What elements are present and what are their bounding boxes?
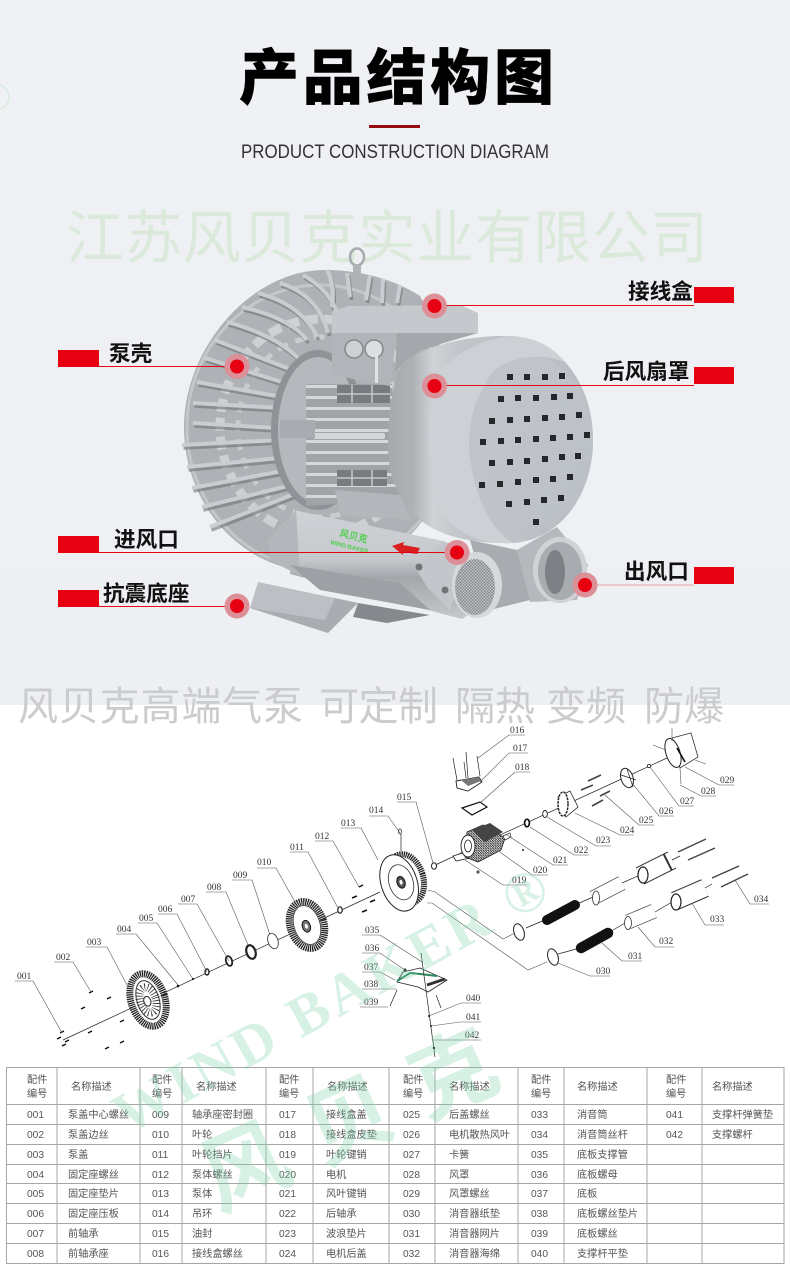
table column group 025 to 032: 消音器海绵 (449, 1247, 500, 1260)
table column group 001 to 008: 固定座压板 (68, 1207, 119, 1220)
table column group 025 to 032: 032 (403, 1249, 420, 1260)
table header: 名称描述 (196, 1080, 237, 1093)
table column group 017 to 024: 022 (279, 1209, 296, 1220)
callout: 抗震底座 (58, 581, 237, 606)
table header: 配件 (152, 1074, 172, 1086)
diagonal brand watermark: 风贝克 (187, 1003, 538, 1229)
table header: 名称描述 (71, 1080, 112, 1093)
table column group 017 to 024: 后轴承 (326, 1207, 357, 1220)
table column group 033 to 040: 039 (531, 1229, 548, 1240)
part 026 fan (618, 767, 636, 789)
slogan: 风贝克高端气泵 (18, 685, 303, 729)
table column group 025 to 032: 后盖螺丝 (449, 1108, 490, 1121)
diagonal brand watermark: WIND BAKER ® (102, 852, 563, 1146)
marker dots (224, 294, 598, 618)
table column group 041 to 042 (666, 1108, 773, 1141)
table column group 001 to 008: 007 (27, 1229, 44, 1240)
table column group 033 to 040 (531, 1108, 638, 1260)
table column group 033 to 040: 底板 (577, 1187, 597, 1200)
table column group 009 to 016: 014 (152, 1209, 169, 1220)
table column group 025 to 032: 030 (403, 1209, 420, 1220)
anti-vibration base (250, 582, 430, 633)
table column group 001 to 008: 006 (27, 1209, 44, 1220)
callout: 泵壳 (58, 341, 237, 367)
inlet and outlet silencer tubes (268, 510, 588, 619)
part number callouts: 006 (158, 905, 172, 915)
part 010 impeller (283, 897, 331, 953)
part number callouts: 029 (720, 776, 734, 786)
callout: 进风口 (58, 527, 458, 552)
table column group 001 to 008: 固定座垫片 (68, 1187, 119, 1200)
part number callouts: 039 (364, 998, 378, 1008)
table column group 017 to 024: 019 (279, 1150, 296, 1161)
lower silencer (546, 866, 748, 967)
motor body (280, 384, 410, 520)
table column group 033 to 040: 034 (531, 1130, 548, 1141)
table column group 025 to 032: 029 (403, 1189, 420, 1200)
table column group 001 to 008 (27, 1108, 129, 1260)
callout: 泵壳: 泵壳 (109, 341, 153, 366)
table column group 001 to 008: 固定座螺丝 (68, 1168, 119, 1181)
table column group 025 to 032: 025 (403, 1110, 420, 1121)
table column group 033 to 040: 底板螺丝垫片 (577, 1207, 638, 1220)
part 003 pump cover (123, 969, 173, 1031)
slogan (18, 685, 724, 729)
slogan: 防爆 (644, 685, 724, 729)
callout: 出风口: 出风口 (624, 559, 689, 584)
shaft axis lines (63, 758, 667, 1040)
part number callouts: 032 (659, 937, 674, 947)
blower illustration (182, 248, 593, 633)
part 029 hood screws (653, 728, 706, 784)
table column group 009 to 016: 015 (152, 1229, 169, 1240)
table column group 033 to 040: 底板螺母 (577, 1168, 618, 1181)
upper silencer (512, 839, 715, 942)
table header: 编号 (27, 1087, 47, 1100)
table header: 编号 (279, 1087, 299, 1100)
table header: 配件 (531, 1074, 551, 1086)
part number callouts: 042 (465, 1031, 480, 1041)
table header: 编号 (666, 1087, 686, 1100)
table column group 025 to 032: 电机散热风叶 (449, 1128, 510, 1141)
table column group 017 to 024: 017 (279, 1110, 296, 1121)
table column group 009 to 016: 接线盒螺丝 (192, 1247, 243, 1260)
company watermark: 江苏风贝克实业有限公司 (66, 206, 708, 271)
tube logo (330, 527, 369, 556)
tube airflow arrow (392, 542, 420, 555)
part number callouts: 038 (364, 980, 378, 990)
part number callouts: 028 (701, 787, 716, 797)
table header: 配件 (27, 1074, 47, 1086)
part number callouts (15, 726, 769, 1041)
part 015 seal (432, 863, 436, 869)
table header: 名称描述 (712, 1080, 753, 1093)
callout: 抗震底座: 抗震底座 (103, 581, 189, 606)
table header (27, 1074, 753, 1100)
table column group 009 to 016: 泵体螺丝 (192, 1169, 233, 1181)
table column group 017 to 024: 叶轮键销 (326, 1148, 367, 1161)
table column group 009 to 016: 叶轮 (192, 1128, 212, 1141)
table column group 001 to 008: 前轴承 (68, 1227, 99, 1240)
part 027 clip (647, 764, 651, 768)
table column group 033 to 040: 035 (531, 1150, 548, 1161)
callout: 后风扇罩 (434, 359, 734, 386)
part 025 screws (581, 775, 610, 806)
table column group 033 to 040: 支撑杆平垫 (577, 1247, 628, 1260)
pump volute (182, 270, 453, 572)
table column group 017 to 024: 接线盒皮垫 (326, 1128, 377, 1141)
table column group 025 to 032: 卡簧 (449, 1148, 469, 1161)
part number callouts: 035 (365, 926, 380, 936)
part number callouts: 013 (341, 819, 356, 829)
part number callouts: 018 (515, 763, 530, 773)
part 013 pump body (373, 848, 432, 916)
table header: 名称描述 (327, 1080, 368, 1093)
part number callouts: 020 (533, 866, 548, 876)
table column group 025 to 032: 消音器纸垫 (449, 1207, 500, 1220)
table column group 001 to 008: 泵盖边丝 (68, 1128, 109, 1141)
table column group 009 to 016: 016 (152, 1249, 169, 1260)
table header: 名称描述 (577, 1080, 618, 1093)
part 001 and 002 screws (57, 991, 124, 1049)
parts table (6, 1067, 784, 1264)
table column group 025 to 032: 消音器网片 (449, 1227, 500, 1240)
part 018 gasket (462, 802, 487, 815)
table column group 033 to 040: 037 (531, 1189, 548, 1200)
part number callouts: 022 (574, 846, 588, 856)
tube logo: 风贝克 (338, 527, 369, 546)
base plate with support rod (390, 953, 447, 1057)
table column group 001 to 008: 前轴承座 (68, 1247, 109, 1260)
table column group 041 to 042: 支撑杆弹簧垫 (712, 1108, 773, 1121)
table column group 033 to 040: 消音筒丝杆 (577, 1128, 628, 1141)
slogan: 隔热 (455, 685, 535, 729)
part number callouts: 014 (369, 806, 384, 816)
callout: 后风扇罩: 后风扇罩 (603, 359, 689, 384)
part number callouts: 030 (596, 967, 610, 977)
title divider (369, 125, 420, 128)
table column group 001 to 008: 001 (27, 1110, 44, 1121)
small parts 004 to 009 (177, 932, 280, 987)
callout: 出风口 (585, 559, 734, 585)
table column group 033 to 040: 038 (531, 1209, 548, 1220)
part number callouts: 026 (659, 807, 674, 817)
part number callouts: 040 (466, 994, 480, 1004)
table column group 009 to 016: 吊环 (192, 1208, 212, 1220)
callout: 接线盒 (434, 279, 734, 306)
part number callouts: 033 (710, 915, 724, 925)
table column group 001 to 008: 008 (27, 1249, 44, 1260)
table header: 编号 (152, 1087, 172, 1100)
table column group 017 to 024: 波浪垫片 (326, 1227, 367, 1240)
part number callouts: 003 (87, 938, 102, 948)
table column group 017 to 024 (279, 1108, 377, 1260)
table column group 017 to 024: 018 (279, 1130, 296, 1141)
table column group 033 to 040: 033 (531, 1110, 548, 1121)
part number callouts: 011 (290, 843, 304, 853)
callout: 接线盒: 接线盒 (628, 279, 693, 304)
table column group 025 to 032: 026 (403, 1130, 420, 1141)
table column group 009 to 016: 010 (152, 1130, 169, 1141)
slogan: 变频 (546, 685, 626, 729)
part 011 washer and 012 screws (338, 885, 375, 913)
fan cover (388, 336, 593, 543)
part number callouts: 016 (510, 726, 524, 736)
table column group 025 to 032: 031 (403, 1229, 420, 1240)
part number callouts: 025 (639, 816, 654, 826)
exploded parts diagram (15, 726, 769, 1057)
table column group 033 to 040: 消音筒 (577, 1108, 608, 1121)
table header: 编号 (531, 1087, 551, 1100)
part number callouts: 024 (620, 826, 634, 836)
part number callouts: 031 (628, 952, 642, 962)
table column group 025 to 032 (403, 1108, 510, 1260)
part number callouts: 002 (56, 953, 70, 963)
part number callouts: 007 (181, 895, 196, 905)
table column group 033 to 040: 底板支撑管 (577, 1148, 628, 1161)
part number callouts: 041 (466, 1013, 480, 1023)
table column group 009 to 016: 泵体 (192, 1188, 212, 1200)
table header: 配件 (666, 1074, 686, 1086)
lifting ring (350, 248, 364, 305)
table header: 配件 (279, 1074, 299, 1086)
table column group 041 to 042: 042 (666, 1130, 683, 1141)
part number callouts: 017 (513, 744, 528, 754)
table column group 025 to 032: 风罩螺丝 (449, 1188, 490, 1200)
table column group 009 to 016: 叶轮挡片 (192, 1148, 233, 1161)
table column group 017 to 024: 接线盒盖 (326, 1108, 367, 1121)
table column group 025 to 032: 027 (403, 1150, 420, 1161)
table column group 017 to 024: 电机 (326, 1168, 346, 1181)
part number callouts: 004 (117, 925, 132, 935)
table column group 017 to 024: 020 (279, 1170, 296, 1181)
table column group 009 to 016: 012 (152, 1170, 169, 1181)
table column group 001 to 008: 003 (27, 1150, 44, 1161)
part 014 eye bolt (398, 829, 402, 851)
part 016 and 017 junction cover with screws (453, 752, 482, 791)
table header: 编号 (403, 1087, 423, 1100)
table column group 025 to 032: 风罩 (449, 1169, 469, 1181)
table column group 041 to 042: 041 (666, 1110, 683, 1121)
table column group 017 to 024: 021 (279, 1189, 296, 1200)
table header: 配件 (403, 1074, 423, 1086)
junction box (332, 305, 478, 386)
part number callouts: 009 (233, 871, 248, 881)
part number callouts: 010 (257, 858, 272, 868)
part number callouts: 008 (207, 883, 222, 893)
table column group 009 to 016: 009 (152, 1110, 169, 1121)
table grid (6, 1067, 784, 1264)
subtitle: PRODUCT CONSTRUCTION DIAGRAM (241, 141, 549, 163)
table column group 001 to 008: 004 (27, 1170, 44, 1181)
silencer connection lines (427, 890, 547, 970)
title: 产品结构图 (239, 45, 554, 112)
table column group 001 to 008: 泵盖 (68, 1148, 88, 1161)
table column group 009 to 016: 013 (152, 1189, 169, 1200)
table column group 033 to 040: 036 (531, 1170, 548, 1181)
part 028 fan hood (662, 733, 698, 769)
part number callouts: 001 (17, 972, 32, 982)
part number callouts: 027 (680, 797, 694, 807)
part number callouts: 019 (512, 876, 526, 886)
part number callouts: 034 (754, 895, 768, 905)
part 019 and 020 motor (453, 823, 524, 874)
part number callouts: 015 (397, 793, 412, 803)
part number callouts: 012 (315, 832, 330, 842)
parts 022 and 023 bearing and spring washer (525, 810, 547, 827)
table column group 001 to 008: 泵盖中心螺丝 (68, 1108, 129, 1121)
table column group 009 to 016: 油封 (192, 1227, 212, 1240)
table column group 017 to 024: 风叶键销 (326, 1187, 367, 1200)
part number callouts: 021 (553, 856, 568, 866)
table column group 041 to 042: 支撑螺杆 (712, 1128, 753, 1141)
table header: 名称描述 (449, 1080, 490, 1093)
table column group 001 to 008: 002 (27, 1130, 44, 1141)
slogan: 可定制 (319, 685, 438, 729)
callout: 进风口: 进风口 (114, 527, 179, 552)
table column group 017 to 024: 024 (279, 1249, 296, 1260)
table column group 033 to 040: 底板螺丝 (577, 1227, 618, 1240)
tube logo: WIND BAKER (330, 540, 369, 556)
table column group 017 to 024: 023 (279, 1229, 296, 1240)
table column group 033 to 040: 040 (531, 1249, 548, 1260)
part number callouts: 023 (596, 836, 610, 846)
table column group 017 to 024: 电机后盖 (326, 1247, 367, 1260)
part number callouts: 036 (365, 944, 380, 954)
table column group 009 to 016 (152, 1108, 253, 1260)
part number callouts: 005 (139, 914, 154, 924)
part 024 motor end cover (558, 791, 578, 817)
part number callouts: 037 (364, 963, 378, 973)
table column group 001 to 008: 005 (27, 1189, 44, 1200)
table column group 009 to 016: 011 (152, 1150, 169, 1161)
table column group 025 to 032: 028 (403, 1170, 420, 1181)
table column group 009 to 016: 轴承座密封圈 (192, 1108, 253, 1121)
